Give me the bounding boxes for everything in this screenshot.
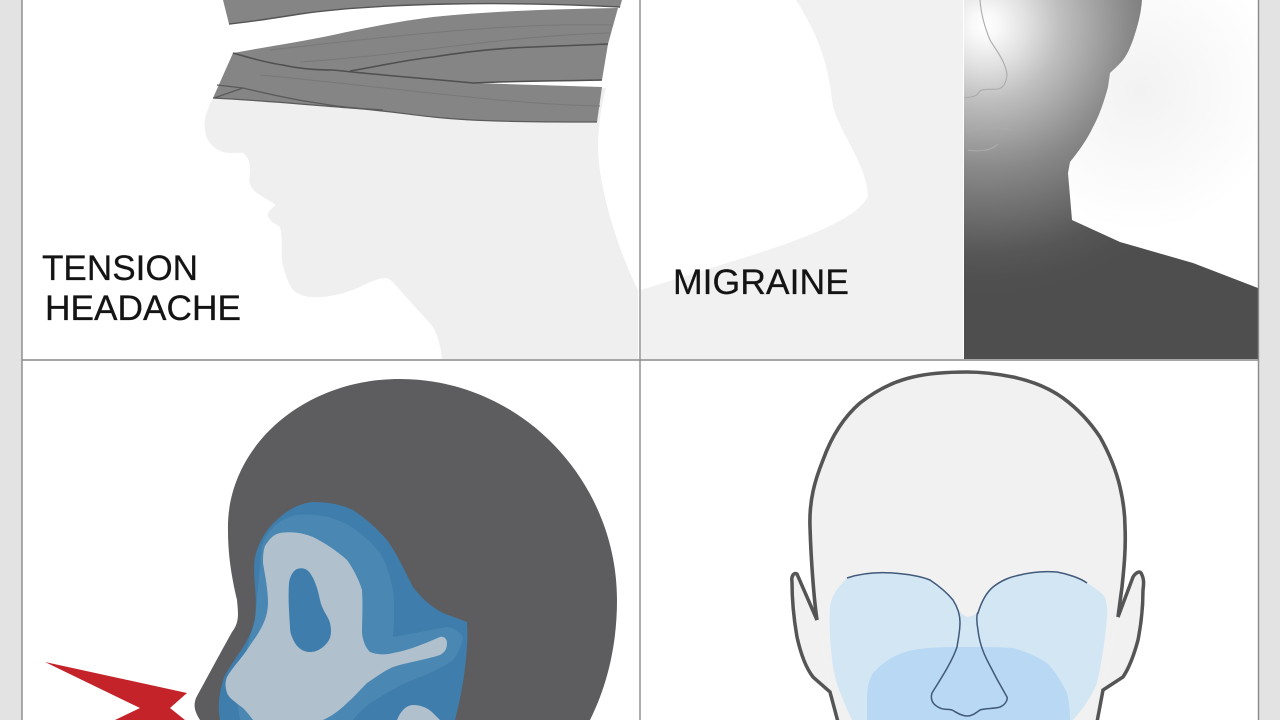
icon: lower pale shape	[397, 705, 440, 720]
heading: tension headache: HEADACHE	[45, 289, 241, 328]
icon: blue sinus area	[219, 502, 467, 720]
icon: head outline	[810, 372, 1125, 620]
icon: upper head band	[223, 0, 622, 24]
icon: light head silhouette	[641, 0, 963, 359]
icon: nose and brow outline	[847, 572, 1087, 716]
heading: tension headache	[42, 249, 241, 328]
icon: right ear	[1097, 572, 1144, 720]
icon: sinus shading	[830, 572, 1107, 720]
panel: migraine	[641, 0, 1258, 359]
panel: tension headache	[42, 0, 638, 359]
icon: mid-blue band	[235, 515, 463, 720]
icon: pale bone shape	[226, 532, 447, 720]
icon: dark head	[195, 379, 617, 720]
icon: halo background	[964, 0, 1258, 359]
icon: front-view head fill	[810, 372, 1125, 720]
icon: darker sinus shading	[867, 647, 1070, 720]
icon: face outline strokes	[965, 0, 1011, 151]
heading: migraine: MIGRAINE	[673, 263, 849, 302]
icon: head silhouette side view	[204, 88, 638, 359]
panel: cluster headache	[45, 379, 617, 720]
icon: inner cavity	[289, 568, 331, 652]
icon: red lightning arrow	[45, 662, 187, 720]
panel: sinus headache	[792, 372, 1144, 720]
icon: dark gradient head and shoulders	[964, 0, 1258, 359]
heading: tension headache: TENSION	[42, 249, 198, 288]
icon: lower head band	[213, 8, 618, 122]
icon: left ear	[792, 573, 838, 720]
